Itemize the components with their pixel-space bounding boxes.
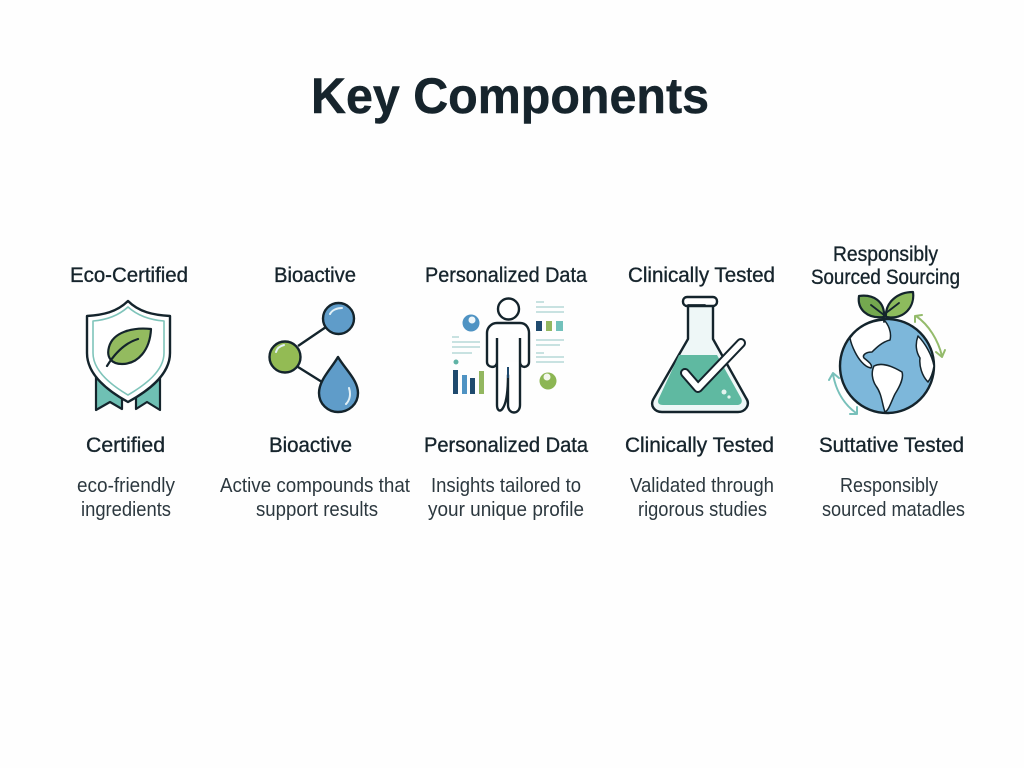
description: eco-friendly ingredients: ingredients [81,499,171,521]
icon: shield with leaf and ribbons [87,301,170,410]
subheading: personalized data: Personalized Data [424,434,588,457]
heading: bioactive: Bioactive [274,264,356,287]
heading: responsibly sourced sourcing: Sourced Sourcing [811,266,960,289]
subheading: suttative tested: Suttative Tested [819,434,964,457]
description: responsibly sourced [822,475,965,521]
heading: clinically tested: Clinically Tested [628,264,775,287]
description: insights tailored [428,475,584,521]
panel: responsibly sourced [811,243,965,521]
icon: person with data charts [452,298,564,412]
description: insights tailored: Insights tailored to [431,475,581,497]
description: validated: Validated through [630,475,774,497]
panel: bioactive [220,264,410,521]
subheading: clinically tested: Clinically Tested [625,434,774,457]
heading: responsibly sourced sourcing [811,243,960,289]
heading: responsibly sourced sourcing: Responsibly [833,243,938,266]
icon: molecule with droplet [270,303,358,412]
description: eco-friendly ingredients: eco-friendly [77,475,175,497]
subheading: certified: Certified [86,434,165,457]
description: active compounds: Active compounds that [220,475,410,497]
description: responsibly sourced: sourced matadles [822,499,965,521]
icon: globe with sprout and arrows [829,292,945,414]
description: validated [630,475,774,521]
panel: clinically tested [625,264,775,521]
panel: personalized data [424,264,588,521]
description: insights tailored: your unique profile [428,499,584,521]
description: active compounds [220,475,410,521]
description: validated: rigorous studies [638,499,767,521]
title: Key Components [311,68,709,124]
description: responsibly sourced: Responsibly [840,475,938,497]
heading: personalized data: Personalized Data [425,264,587,287]
icon: flask with check mark [652,297,748,412]
description: eco-friendly ingredients [77,475,175,521]
heading: eco-certified: Eco-Certified [70,264,188,287]
panel: eco-certified [70,264,188,521]
description: active compounds: support results [256,499,378,521]
subheading: bioactive: Bioactive [269,434,352,457]
